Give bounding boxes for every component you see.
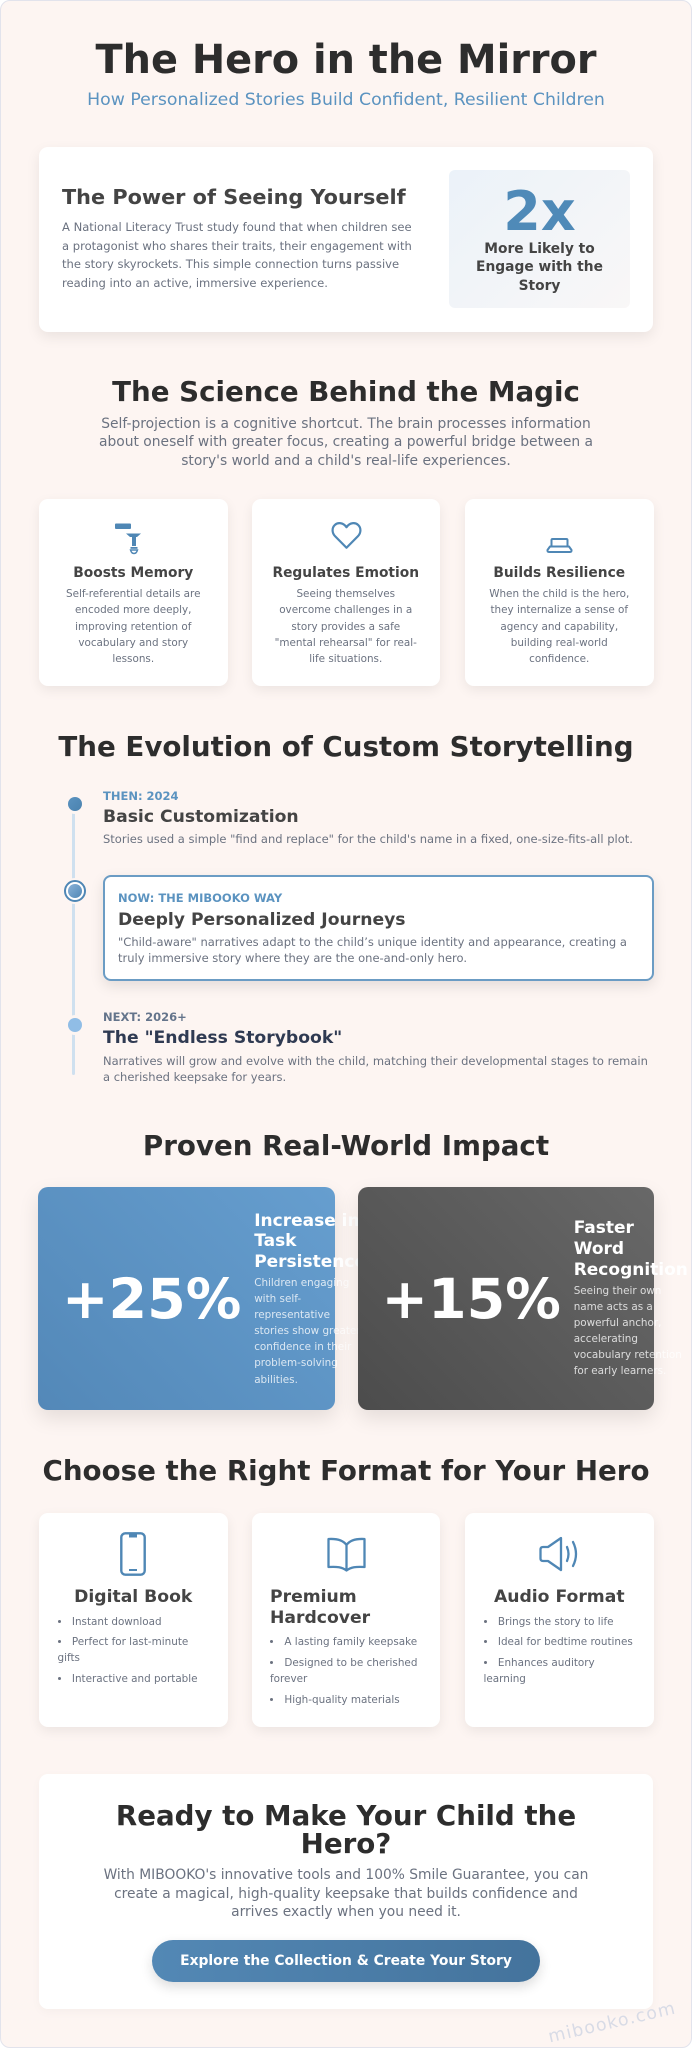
panel: the power of seeing yourself: [39, 147, 653, 332]
text: self-projection intro: Self-projection is a cognitive shortcut. The brain processes information: [101, 416, 591, 432]
heading: ready to make your child the hero: Hero?: [301, 1827, 391, 1860]
text: self-projection intro: [99, 416, 593, 469]
format title: [270, 1587, 370, 1628]
card text: overcome challenges in a: [279, 604, 412, 616]
stat title: Recognition: [574, 1260, 688, 1280]
text: literacy study summary: [62, 220, 412, 290]
stat text: for early learners.: [574, 1365, 666, 1377]
timeline dot: now: [64, 880, 86, 902]
stat text: Seeing their own: [574, 1284, 661, 1296]
text: self-projection intro: about oneself with greater focus, creating a powerful bridge between a: [99, 434, 593, 450]
feature list: A lasting family keepsake: [284, 1636, 417, 1648]
item title: The "Endless Storybook": [103, 1028, 342, 1048]
stat box: 2x more likely: [449, 170, 630, 308]
icon: phone: [120, 1532, 146, 1576]
card text: Seeing themselves: [296, 588, 395, 600]
format title: Audio Format: [494, 1587, 625, 1607]
item text: Stories used a simple "find and replace" for the child's name in a fixed, one-size-fits-all plot.: [103, 832, 633, 846]
stat text: problem-solving: [254, 1357, 338, 1369]
timeline dot: next: [68, 1018, 82, 1032]
card text: "mental rehearsal" for real-: [275, 637, 417, 649]
timeline item: then: [103, 789, 633, 846]
feature list: Perfect for last-minute gifts: [58, 1636, 188, 1664]
stat text: abilities.: [254, 1374, 298, 1386]
heading: the power of seeing yourself: The Power of Seeing Yourself: [62, 185, 406, 209]
timeline line: [72, 803, 75, 1075]
heading: proven real-world impact: Proven Real-World Impact: [143, 1129, 549, 1162]
format title: Hardcover: [270, 1608, 370, 1628]
timeline item: next: [103, 1010, 648, 1084]
text: literacy study summary: reading into an active, immersive experience.: [62, 276, 328, 290]
card text: [489, 588, 629, 665]
stat title: [574, 1218, 688, 1280]
card text: Self-referential details are: [66, 588, 200, 600]
stat label: Engage with the: [476, 259, 603, 275]
feature list: Enhances auditory learning: [484, 1657, 595, 1685]
panel: premium hardcover: [252, 1513, 440, 1727]
icon: speaker: [539, 1536, 578, 1572]
stat title: [254, 1211, 366, 1272]
stat text: with self-: [254, 1293, 301, 1305]
icon: laptop: [546, 538, 572, 553]
feature list: High-quality materials: [284, 1694, 400, 1706]
icon: heart: [332, 522, 362, 549]
panel: regulates emotion: [252, 499, 440, 686]
big number: +15%: [382, 1266, 561, 1332]
stat label: Story: [519, 278, 560, 294]
button: explore the collection: [152, 1940, 540, 1982]
heading: choose the right format: Choose the Right Format for Your Hero: [43, 1454, 649, 1487]
panel: +25% task persistence: [38, 1187, 334, 1410]
title: The Hero in the Mirror: [96, 37, 596, 83]
card text: When the child is the hero,: [489, 588, 629, 600]
button: explore the collection: Explore the Collection & Create Your Story: [180, 1953, 512, 1969]
card title: Boosts Memory: [73, 565, 193, 581]
panel: builds resilience: [465, 499, 654, 686]
timeline: [64, 789, 657, 1084]
feature list: Ideal for bedtime routines: [498, 1636, 633, 1648]
era label: NEXT: 2026+: [103, 1010, 187, 1024]
card text: building real-world: [511, 637, 608, 649]
feature list: Designed to be cherished forever: [270, 1657, 417, 1685]
icon: open book: [327, 1538, 366, 1572]
timeline item: now highlight box: [103, 875, 654, 981]
stat title: Persistence: [254, 1252, 366, 1272]
icon: memory glyph: [115, 524, 141, 554]
stat text: Children engaging: [254, 1277, 349, 1289]
panel: call to action: [39, 1774, 653, 2009]
panel: digital book: [39, 1513, 228, 1727]
era label: THEN: 2024: [103, 789, 179, 803]
stat text: accelerating: [574, 1333, 638, 1345]
panel: +15% word recognition: [358, 1187, 654, 1410]
era label: NOW: THE MIBOOKO WAY: [118, 891, 282, 905]
card text: [66, 588, 200, 665]
timeline dot: then: [68, 797, 82, 811]
stat text: stories show greater: [254, 1325, 361, 1337]
stat title: Task: [254, 1231, 296, 1251]
heading: the science behind the magic: The Science Behind the Magic: [112, 375, 580, 408]
heading: ready to make your child the hero: [116, 1799, 576, 1860]
item text: [103, 1054, 648, 1084]
text: self-projection intro: story's world and a child's real-life experiences.: [181, 453, 511, 469]
card text: improving retention of: [75, 621, 191, 633]
feature list: Interactive and portable: [72, 1673, 198, 1685]
feature list: Brings the story to life: [498, 1616, 614, 1628]
stat text: confidence in their: [254, 1341, 351, 1353]
stat text: representative: [254, 1309, 330, 1321]
card text: agency and capability,: [500, 621, 618, 633]
card text: story provides a safe: [291, 621, 400, 633]
card text: they internalize a sense of: [490, 604, 628, 616]
big number: +25%: [62, 1266, 241, 1332]
feature list: [484, 1616, 633, 1685]
item title: Deeply Personalized Journeys: [118, 910, 406, 930]
heading: the evolution of custom storytelling: The Evolution of Custom Storytelling: [58, 730, 634, 763]
card title: Builds Resilience: [493, 565, 625, 581]
stat text: name acts as a: [574, 1301, 653, 1313]
text: cta description: [104, 1867, 588, 1920]
feature list: Instant download: [72, 1616, 162, 1628]
text: literacy study summary: A National Literacy Trust study found that when children see: [62, 220, 412, 234]
text: cta description: With MIBOOKO's innovative tools and 100% Smile Guarantee, you can: [104, 1867, 588, 1883]
card text: [275, 588, 417, 665]
text: literacy study summary: a protagonist who shares their traits, their engagement with: [62, 239, 412, 253]
stat title: Increase in: [254, 1211, 360, 1231]
item text: a cherished keepsake for years.: [103, 1070, 286, 1084]
heading: ready to make your child the hero: Ready to Make Your Child the: [116, 1799, 576, 1832]
card text: vocabulary and story: [78, 637, 188, 649]
format title: Digital Book: [74, 1587, 192, 1607]
panel: boosts memory: [39, 499, 228, 686]
stat text: powerful anchor,: [574, 1317, 661, 1329]
item text: [118, 935, 627, 965]
card text: encoded more deeply,: [75, 604, 191, 616]
card text: lessons.: [112, 653, 154, 665]
card text: confidence.: [529, 653, 589, 665]
feature list: [270, 1636, 417, 1706]
stat title: Faster: [574, 1218, 634, 1238]
item text: "Child-aware" narratives adapt to the child’s unique identity and appearance, creating a: [118, 935, 627, 949]
stat text: [254, 1277, 361, 1386]
stat number: 2x: [503, 180, 576, 243]
card title: Regulates Emotion: [272, 565, 419, 581]
stat text: vocabulary retention: [574, 1349, 682, 1361]
text: literacy study summary: the story skyrockets. This simple connection turns passive: [62, 257, 399, 271]
stat text: [574, 1284, 682, 1377]
text: cta description: arrives exactly when you need it.: [231, 1904, 461, 1920]
format title: Premium: [270, 1587, 357, 1607]
stat title: Word: [574, 1239, 624, 1259]
stat label: [476, 241, 603, 294]
watermark: mibooko.com: [546, 1998, 678, 2047]
stat label: More Likely to: [484, 241, 595, 257]
subtitle: How Personalized Stories Build Confident, Resilient Children: [87, 90, 605, 110]
panel: audio format: [465, 1513, 654, 1727]
feature list: [58, 1616, 198, 1685]
item text: Narratives will grow and evolve with the child, matching their developmental stages to remain: [103, 1054, 648, 1068]
text: cta description: create a magical, high-quality keepsake that builds confidence and: [114, 1886, 578, 1902]
item text: truly immersive story where they are the one-and-only hero.: [118, 951, 467, 965]
card text: life situations.: [309, 653, 382, 665]
item title: Basic Customization: [103, 807, 299, 827]
